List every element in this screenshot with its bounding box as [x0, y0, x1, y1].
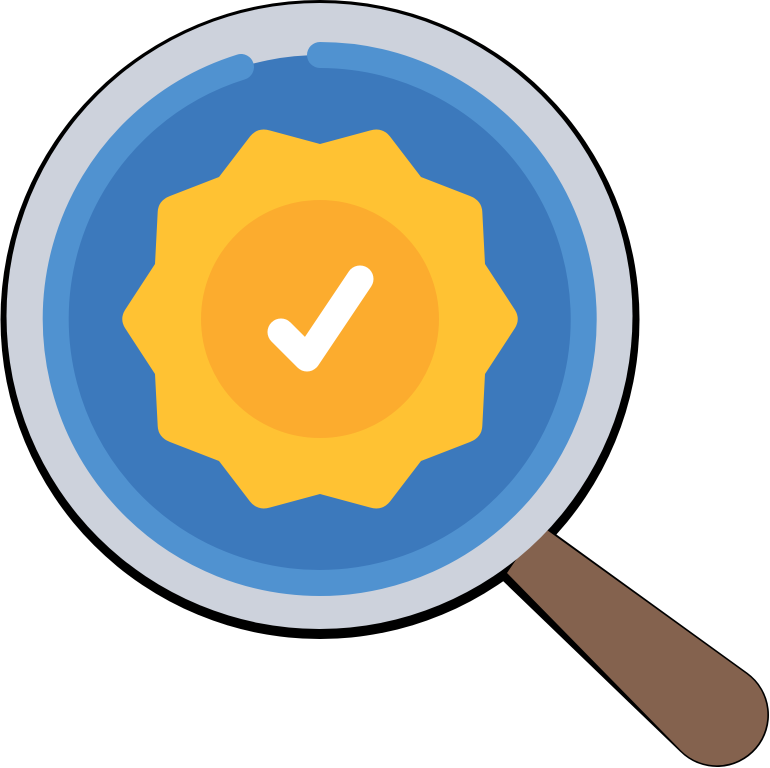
- lens glass: dark blue disc: [56, 55, 584, 583]
- icon: white check mark: [281, 279, 360, 358]
- lens highlight: light blue arc: [56, 55, 584, 583]
- badge: yellow seal: [122, 130, 518, 508]
- badge: orange centre: [201, 200, 439, 438]
- badge: [122, 130, 518, 508]
- handle: [490, 520, 769, 767]
- lens frame: grey ring: [6, 3, 632, 629]
- lens outline: black rim: [0, 0, 640, 639]
